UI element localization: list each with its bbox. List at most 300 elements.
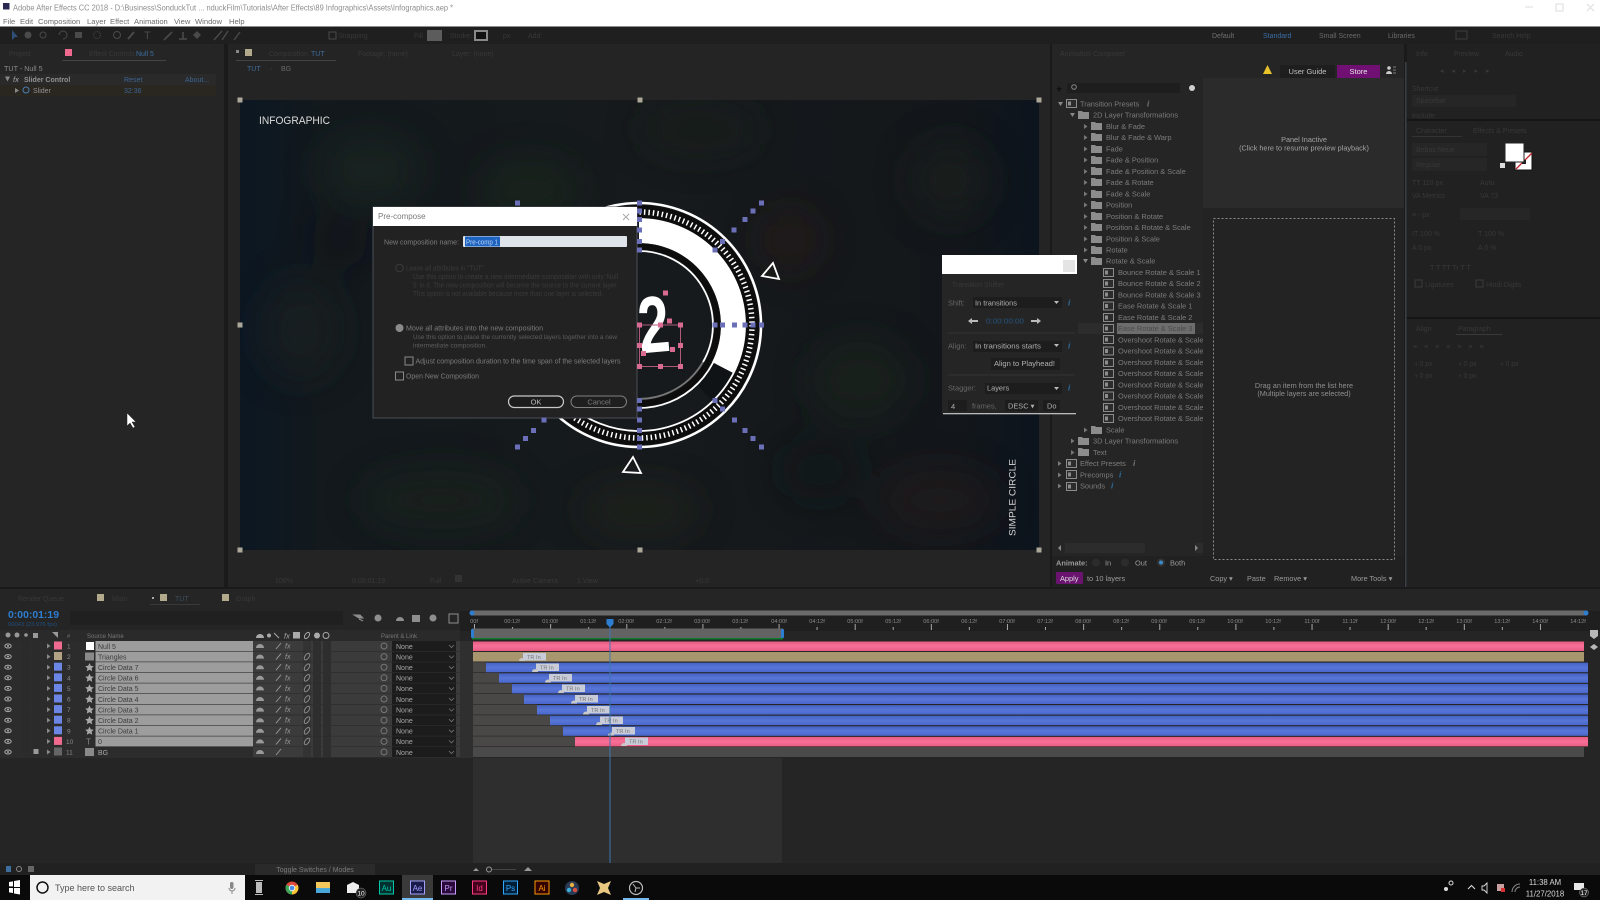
option: move all attributes: intermediate composition. <box>413 342 487 350</box>
title bar and menu bar <box>0 0 1600 26</box>
timeline tabs <box>18 594 256 605</box>
effects tree list: Overshoot Rotate & Scale 6 <box>1118 392 1210 401</box>
effects tree list: Position & Rotate <box>1106 212 1163 221</box>
panel: preview, character, paragraph: Ligatures <box>1425 282 1454 289</box>
panel: preview, character, paragraph <box>1405 44 1600 587</box>
icon: after effects active <box>402 875 433 900</box>
layer bars <box>460 641 1588 863</box>
effects tree list: Overshoot Rotate & Scale 8 <box>1118 414 1210 423</box>
time ruler: 13:12f <box>1494 619 1510 625</box>
icon: photoshop <box>504 881 518 894</box>
workspace switcher: Standard <box>1263 33 1292 40</box>
align row: Align to Playhead! <box>994 359 1055 368</box>
button: Cancel: Cancel <box>587 398 611 406</box>
icon: indesign <box>472 881 486 894</box>
icon: windows start <box>9 880 20 894</box>
effects tree list: Transition Presets <box>1080 99 1140 108</box>
effects tree list: Ease Rotate & Scale 3 <box>1118 324 1192 333</box>
animate options: Apply <box>1060 574 1079 583</box>
name input: Pre-comp 1 <box>466 238 498 246</box>
timeline tabs: Graph <box>236 596 256 603</box>
option: move all attributes <box>396 324 617 350</box>
TR In markers <box>519 653 648 746</box>
TR In markers: TR In <box>616 729 630 735</box>
time ruler: 01:12f <box>580 619 596 625</box>
time ruler: 04:00f <box>771 619 787 625</box>
align row: Align: <box>948 342 966 350</box>
time ruler: 14:00f <box>1532 619 1548 625</box>
TR In markers: TR In <box>629 740 643 746</box>
panel: preview, character, paragraph: T 100 % <box>1478 231 1504 238</box>
toolbar: Add: <box>528 33 542 40</box>
panel: effect controls: Effect Controls <box>89 51 135 58</box>
shift row: i <box>1068 298 1071 308</box>
layer list: 8 <box>67 718 71 725</box>
panel: animation composer: Animation Composer <box>1060 51 1126 58</box>
effects tree list: i <box>1133 459 1136 468</box>
layer list: fx <box>285 644 291 650</box>
layer list: Circle Data 2 <box>98 718 139 725</box>
time ruler: 09:12f <box>1189 619 1205 625</box>
effects tree list: Overshoot Rotate & Scale 7 <box>1118 403 1210 412</box>
playhead <box>606 619 614 863</box>
TR In markers: TR In <box>527 655 541 661</box>
effects tree list: Overshoot Rotate & Scale 1 <box>1118 335 1210 344</box>
layer list: Circle Data 6 <box>98 676 139 683</box>
effects tree list: Fade & Position <box>1106 156 1158 165</box>
time ruler: 13:00f <box>1456 619 1472 625</box>
footer buttons: Remove ▾ <box>1274 574 1307 583</box>
effects tree list: Ease Rotate & Scale 2 <box>1118 313 1192 322</box>
effects tree list: Sounds <box>1080 482 1105 491</box>
option: leave attributes (disabled): This option is not available because more than one layer is selected. <box>413 291 603 298</box>
selection dots: blue layer points <box>515 200 764 450</box>
stagger row <box>948 383 1071 411</box>
stagger row: i <box>1068 384 1071 392</box>
layer list: BG <box>98 750 108 757</box>
panel: effect controls: Null 5 <box>136 51 154 58</box>
animate options: Both <box>1170 558 1185 568</box>
layer header <box>0 630 460 641</box>
effects tree list: i <box>1111 482 1114 491</box>
layer list: Circle Data 1 <box>98 729 139 736</box>
layer list: fx <box>285 686 291 693</box>
footer buttons: More Tools ▾ <box>1351 574 1393 583</box>
system tray: 11/27/2018 <box>1526 890 1564 898</box>
time ruler: 08:00f <box>1075 619 1091 625</box>
icon: mail: 10 <box>357 890 365 898</box>
panel: preview, character, paragraph: ≡≡≡≡≡≡≡ <box>1413 344 1491 351</box>
layer list: fx <box>285 675 291 682</box>
layer list: fx <box>285 739 291 746</box>
footer buttons: Paste <box>1247 574 1266 583</box>
time ruler: 11:12f <box>1342 619 1358 625</box>
workspace switcher: Small Screen <box>1319 33 1361 40</box>
title bar and menu bar: View <box>174 17 191 26</box>
right column: preview area <box>1203 62 1404 560</box>
search box: Type here to search <box>55 883 135 893</box>
shift row <box>948 297 1071 326</box>
icon: indesign: Id <box>476 884 483 893</box>
icon: resolve <box>565 881 579 895</box>
icon: file explorer <box>316 882 330 893</box>
panel: preview, character, paragraph: A 0 px <box>1412 245 1432 252</box>
panel: composition viewer <box>228 44 1050 587</box>
colour swatch <box>1500 143 1532 170</box>
icon: audition: Au <box>382 884 391 893</box>
option: leave attributes (disabled) <box>396 264 618 298</box>
TR In markers: TR In <box>553 676 567 682</box>
animate options: Out <box>1135 558 1147 568</box>
animate options <box>1052 556 1404 587</box>
right column: preview area: (Click here to resume preview playback) <box>1239 144 1369 152</box>
layer list: fx <box>285 696 291 704</box>
workspace switcher <box>1212 31 1531 40</box>
panel: preview, character, paragraph: Character <box>1416 128 1447 135</box>
circular gauge <box>517 203 761 447</box>
time ruler: 11:00f <box>1304 619 1320 625</box>
layer list: 2 <box>67 654 71 661</box>
time ruler: 00:12f <box>504 619 520 625</box>
title bar and menu bar: Adobe After Effects CC 2018 - D:\Business\SonduckTut ... nduckFilm\Tutorials\After Effects\89 Infographics\Assets\Infographics.aep * <box>13 4 453 12</box>
icon: after effects active: Ae <box>413 884 423 893</box>
panel: composition viewer: ‹ <box>270 66 273 73</box>
animate options: Animate: <box>1056 558 1088 568</box>
option: move all attributes: Use this option to place the currently selected layers together into a new <box>413 334 617 341</box>
icon: task view <box>255 880 263 895</box>
viewer footer controls: Full <box>430 578 442 585</box>
effects tree list: Text <box>1093 448 1107 457</box>
time ruler: 01:00f <box>542 619 558 625</box>
workspace switcher: Search Help <box>1492 33 1531 40</box>
shift row: Shift: <box>948 298 965 308</box>
current time <box>8 610 59 628</box>
layer list: None <box>396 665 413 672</box>
TR In markers: TR In <box>591 708 605 714</box>
stagger row: Stagger: <box>948 384 976 392</box>
panel: transition shifter <box>942 255 1077 414</box>
effects tree list: i <box>1147 99 1150 108</box>
layer list: None <box>396 729 413 736</box>
panel: preview, character, paragraph: Spacebar <box>1416 98 1447 105</box>
name input <box>463 236 627 247</box>
panel: effect controls: fx <box>13 75 19 84</box>
timeline side icons <box>1590 630 1598 650</box>
panel: preview, character, paragraph: IT 100 % <box>1412 231 1440 238</box>
title bar and menu bar: Composition <box>38 17 80 26</box>
layer list: Null 5 <box>98 644 116 651</box>
layer list: 9 <box>67 728 71 735</box>
layer list: None <box>396 676 413 683</box>
time ruler: 03:00f <box>694 619 710 625</box>
viewer layer handles <box>238 98 1042 552</box>
stagger row: 4 <box>951 402 955 411</box>
layer list: fx <box>285 654 291 661</box>
right column: preview area: User Guide <box>1289 67 1326 76</box>
title bar and menu bar: Help <box>229 17 245 26</box>
layer list: fx <box>285 665 291 672</box>
panel: pre-compose dialog <box>373 207 637 418</box>
TR In markers: TR In <box>540 666 554 672</box>
footer buttons: Copy ▾ <box>1210 574 1233 583</box>
effects tree list: i <box>1119 470 1122 479</box>
icon: illustrator <box>535 881 549 894</box>
panel: composition viewer: Footage: (none) <box>358 51 408 58</box>
option: leave attributes (disabled): Leave all attributes in "TUT" <box>406 266 484 272</box>
toolbar: Snapping <box>338 33 368 40</box>
effects tree list: Rotate & Scale <box>1106 257 1155 266</box>
effects tree list: Fade & Scale <box>1106 189 1150 198</box>
button: OK: OK <box>531 398 541 406</box>
layer list: 4 <box>67 675 71 682</box>
stagger row: Do <box>1047 402 1056 410</box>
layer list: fx <box>285 728 291 735</box>
composition footage background <box>240 100 1039 550</box>
panel: preview, character, paragraph: VA 73 <box>1480 193 1498 200</box>
title bar and menu bar: File <box>3 17 15 26</box>
animate options: to 10 layers <box>1087 574 1126 583</box>
panel: pre-compose dialog: Pre-compose <box>378 212 426 221</box>
title bar and menu bar: Edit <box>20 17 34 26</box>
shift row: 0:00:00:00 <box>986 318 1024 326</box>
time ruler: 14:12f <box>1570 619 1586 625</box>
system tray: 11:38 AM <box>1529 878 1561 887</box>
panel: preview, character, paragraph: Preview <box>1454 51 1480 58</box>
time ruler: 05:12f <box>885 619 901 625</box>
timeline switches <box>354 614 458 623</box>
effects tree list: Ease Rotate & Scale 1 <box>1118 302 1192 311</box>
effects tree list <box>1056 83 1210 491</box>
time ruler: 10:00f <box>1227 619 1243 625</box>
effects tree list: Overshoot Rotate & Scale 3 <box>1118 358 1210 367</box>
time ruler <box>460 610 1600 631</box>
layer list: 3 <box>67 665 71 672</box>
right column: preview area: Panel Inactive <box>1281 135 1327 144</box>
layer list: None <box>396 739 413 746</box>
panel: preview, character, paragraph: A 0 % <box>1478 245 1496 252</box>
stagger row: Layers <box>987 384 1009 392</box>
panel: preview, character, paragraph: ⫞ 0 px <box>1414 361 1433 368</box>
panel: preview, character, paragraph: ◂ ◂ ▸ ▸ ▸ <box>1440 68 1492 75</box>
stagger row: frames, <box>972 402 997 410</box>
align row <box>948 341 1071 370</box>
align row: In transitions starts <box>975 342 1041 350</box>
layer list: fx <box>285 707 291 714</box>
effects tree list: Fade & Position & Scale <box>1106 167 1186 176</box>
viewer footer controls: +0.0 <box>695 578 709 585</box>
panel: composition viewer: TUT <box>311 51 325 58</box>
effects tree list: Position <box>1106 201 1132 210</box>
effects tree list: Blur & Fade <box>1106 122 1145 131</box>
panel: preview, character, paragraph: Info <box>1416 51 1428 58</box>
viewer footer controls: 1 View <box>577 578 599 585</box>
title bar and menu bar: Window <box>195 17 223 26</box>
layer list: T <box>86 738 91 746</box>
layer header: Source Name <box>87 634 124 640</box>
panel: preview, character, paragraph: VA Metrics <box>1412 193 1445 200</box>
time ruler: 00f <box>470 619 478 625</box>
toolbar: Fill <box>414 33 423 40</box>
toolbar: px <box>503 33 511 40</box>
layer list: None <box>396 686 413 693</box>
checkbox: adjust duration: Adjust composition duration to the time span of the selected layers <box>416 358 621 366</box>
effects tree list: Effect Presets <box>1080 459 1126 468</box>
animate options: In <box>1105 558 1111 568</box>
effects tree list: Fade <box>1106 144 1123 153</box>
time ruler: 10:12f <box>1265 619 1281 625</box>
icon: plugin app <box>597 881 611 895</box>
layer list <box>0 641 460 758</box>
selection box: pink number layer <box>637 290 683 369</box>
TR In markers: TR In <box>579 697 593 703</box>
panel: preview, character, paragraph: Audio <box>1505 51 1523 58</box>
effects tree list: Rotate <box>1106 246 1128 254</box>
icon: chrome <box>286 882 298 894</box>
align row: i <box>1068 342 1071 350</box>
icon: photoshop: Ps <box>506 884 515 893</box>
toolbar: T <box>144 30 151 42</box>
icon: premiere: Pr <box>444 884 453 893</box>
panel: preview, character, paragraph: ⫞ 0 px <box>1458 361 1477 368</box>
toolbar <box>0 27 1600 44</box>
time ruler: 04:12f <box>809 619 825 625</box>
time ruler: 09:00f <box>1151 619 1167 625</box>
timeline tabs: Main <box>112 596 127 603</box>
option: leave attributes (disabled): Use this option to create a new intermediate composition with only 'Null <box>413 274 618 281</box>
layer list: 10 <box>66 739 74 746</box>
icon: illustrator: Ai <box>538 884 546 893</box>
panel: preview, character, paragraph: Align <box>1416 326 1432 333</box>
workspace switcher: Libraries <box>1388 33 1415 40</box>
effects tree list: Bounce Rotate & Scale 2 <box>1118 279 1201 288</box>
time ruler: 05:00f <box>847 619 863 625</box>
time ruler: 06:12f <box>961 619 977 625</box>
button: OK <box>508 396 564 408</box>
panel: preview, character, paragraph: Paragraph <box>1458 326 1491 333</box>
viewer footer controls: Active Camera <box>512 578 558 585</box>
panel: preview, character, paragraph: Regular <box>1416 162 1441 169</box>
layer header: Parent & Link <box>381 634 418 640</box>
layer list: 5 <box>67 686 71 693</box>
effects tree list: 3D Layer Transformations <box>1093 437 1178 446</box>
toolbar: Stroke: <box>450 33 472 40</box>
panel: transition shifter: Transition Shifter <box>952 282 1005 289</box>
time ruler: 12:12f <box>1418 619 1434 625</box>
taskbar <box>0 875 1600 900</box>
time ruler: 06:00f <box>923 619 939 625</box>
right column: preview area: (Multiple layers are selected) <box>1257 389 1351 398</box>
footer buttons <box>1210 574 1393 583</box>
timeline tabs: Render Queue <box>18 596 64 603</box>
panel: effect controls: TUT - Null 5 <box>4 64 43 73</box>
option: leave attributes (disabled): 5' in it. The new composition will become the source to the current layer. <box>413 282 618 290</box>
panel: preview, character, paragraph: Auto <box>1480 180 1495 187</box>
effects tree list: Overshoot Rotate & Scale 2 <box>1118 347 1210 356</box>
effects tree list: Precomps <box>1080 470 1114 479</box>
work area <box>471 628 784 640</box>
layer list: 0 <box>98 739 102 746</box>
layer header: fx <box>284 632 290 640</box>
panel: effect controls: Reset <box>124 77 142 84</box>
panel: preview, character, paragraph: TT 110 px <box>1412 180 1443 187</box>
time ruler: 12:00f <box>1380 619 1396 625</box>
panel: composition viewer: BG <box>281 66 291 73</box>
timeline footer: Toggle Switches / Modes <box>276 867 354 874</box>
layer list: Circle Data 7 <box>98 665 139 672</box>
layer header: # <box>67 634 71 640</box>
dashed drop zone <box>1214 218 1394 560</box>
panel: preview, character, paragraph: ⫞ 0 px <box>1414 373 1433 380</box>
panel: preview, character, paragraph: ⫞ 0 px <box>1458 373 1477 380</box>
title bar and menu bar: Effect <box>110 17 130 26</box>
layer list: None <box>396 718 413 725</box>
time ruler: 02:00f <box>618 619 634 625</box>
effects tree list: Bounce Rotate & Scale 3 <box>1118 290 1201 300</box>
current time: 00043 (23.976 fps) <box>8 622 57 628</box>
right column: preview area: Store <box>1350 67 1367 76</box>
panel: timeline <box>0 589 1600 875</box>
timeline footer <box>0 863 1600 875</box>
panel: effect controls: Slider Control <box>24 77 70 84</box>
timeline tabs: TUT <box>175 596 189 603</box>
panel: effect controls <box>0 44 224 587</box>
panel: preview, character, paragraph: Include: <box>1412 113 1437 120</box>
layer list: None <box>396 654 413 661</box>
effects tree list: Position & Rotate & Scale <box>1106 223 1191 232</box>
layer list: 6 <box>67 696 71 704</box>
panel: composition viewer: Layer: (none) <box>452 51 494 58</box>
stagger row: DESC ▾ <box>1008 402 1035 410</box>
panel: effect controls: 32:36 <box>124 88 142 95</box>
icon: mail <box>347 882 366 898</box>
shift row: In transitions <box>975 298 1017 308</box>
button: Cancel <box>571 396 626 408</box>
layer list: 11 <box>66 750 73 756</box>
layer list: Circle Data 4 <box>98 697 139 704</box>
viewer footer controls: 0:00:01:19 <box>352 578 385 585</box>
TR In markers: TR In <box>566 686 580 692</box>
effects tree list: Fade & Rotate <box>1106 178 1154 187</box>
icon: OBS <box>623 882 649 900</box>
workspace switcher: Default <box>1212 33 1234 40</box>
time ruler: 03:12f <box>732 619 748 625</box>
panel: composition viewer: TUT <box>247 66 261 73</box>
panel: preview, character, paragraph: Effects & Presets <box>1473 128 1527 135</box>
option: move all attributes: Move all attributes into the new composition <box>406 326 543 332</box>
panel: effect controls: About... <box>185 77 209 84</box>
layer list: 7 <box>67 707 71 714</box>
viewer footer controls <box>275 575 709 585</box>
horizontal scrollbar <box>1058 543 1205 553</box>
time ruler: 07:12f <box>1037 619 1053 625</box>
layer list: Circle Data 5 <box>98 686 139 693</box>
TR In markers: TR In <box>604 718 618 724</box>
panel: pre-compose dialog: New composition name: <box>384 240 459 246</box>
icon: audition <box>380 881 394 894</box>
current time: 0:00:01:19 <box>8 610 59 621</box>
search box <box>30 875 245 900</box>
triangle marker bottom <box>623 457 641 473</box>
checkbox: open new composition: Open New Composition <box>406 374 479 380</box>
time ruler: 08:12f <box>1113 619 1129 625</box>
icon: premiere <box>442 881 456 894</box>
panel: preview, character, paragraph: Shortcut <box>1412 86 1438 93</box>
effects tree list: Bounce Rotate & Scale 1 <box>1118 268 1201 277</box>
panel: effect controls: Project <box>9 51 31 58</box>
effects tree list: Overshoot Rotate & Scale 5 <box>1118 380 1210 389</box>
right column: preview area: Drag an item from the list here <box>1255 381 1353 390</box>
layer list: None <box>396 750 413 757</box>
